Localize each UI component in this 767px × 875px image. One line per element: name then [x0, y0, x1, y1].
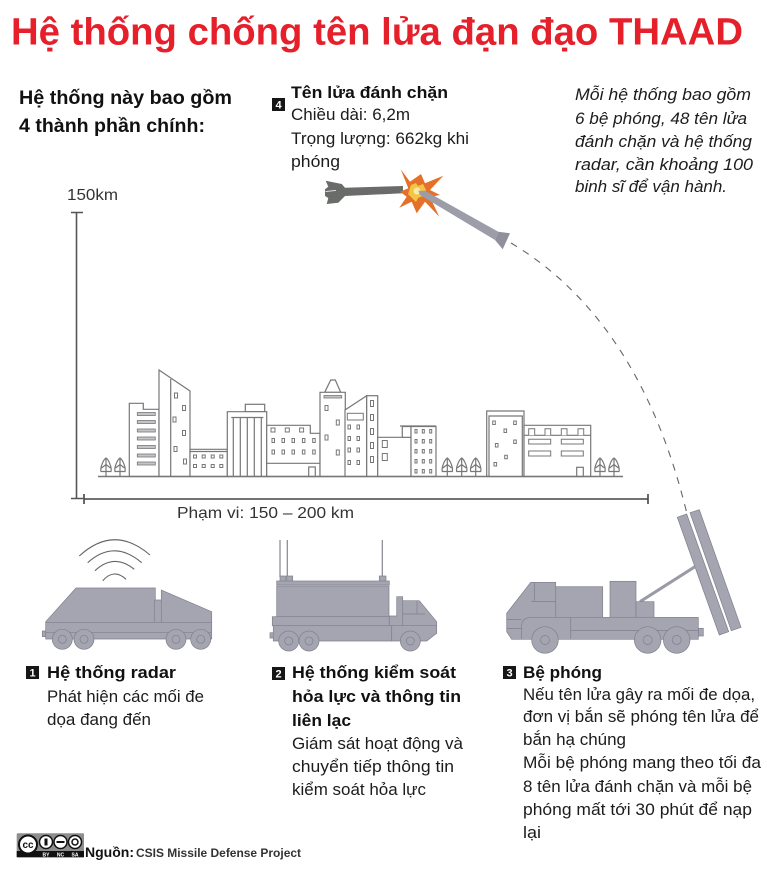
- interceptor text block: Tên lửa đánh chặn: [291, 83, 448, 102]
- number badge 3: 3: [506, 668, 513, 680]
- fire control text block: Giám sát hoạt động và: [292, 735, 464, 753]
- interceptor text block: [272, 83, 469, 171]
- interceptor missile: [418, 191, 510, 249]
- interceptor text block: Chiều dài: 6,2m: [291, 106, 410, 124]
- system note: radar, cần khoảng 100: [575, 156, 754, 174]
- radar text block: [26, 663, 204, 729]
- icon: creative commons badge: NC: [57, 852, 64, 858]
- radar text block: Hệ thống radar: [47, 663, 176, 682]
- interceptor text block: Trọng lượng: 662kg khi: [291, 130, 469, 148]
- icon: creative commons badge: SA: [72, 852, 79, 858]
- source line: CSIS Missile Defense Project: [136, 848, 301, 860]
- range axis: Phạm vi: 150 – 200 km: [177, 505, 354, 522]
- icon: creative commons badge: cc: [22, 840, 34, 851]
- number badge 4: [272, 98, 285, 112]
- icon: creative commons badge: [17, 833, 84, 858]
- system note: đánh chặn và hệ thống: [575, 133, 753, 151]
- launcher text block: Mỗi bệ phóng mang theo tối đa: [523, 753, 762, 772]
- system note: [575, 85, 754, 196]
- interceptor text block: phóng: [291, 153, 340, 171]
- radar text block: Phát hiện các mối đe: [47, 688, 204, 706]
- system note: 6 bệ phóng, 48 tên lửa: [575, 110, 747, 128]
- number badge 4: 4: [275, 100, 282, 112]
- launcher text block: đơn vị bắn sẽ phóng tên lửa để: [523, 707, 759, 726]
- fire control text block: kiểm soát hỏa lực: [292, 781, 426, 799]
- source line: Nguồn:: [85, 844, 134, 860]
- launcher text block: phóng mất tới 30 phút để nạp: [523, 801, 752, 819]
- intro heading: 4 thành phần chính:: [19, 116, 205, 137]
- icon: fire control truck: [270, 540, 437, 651]
- intro heading: [19, 88, 232, 137]
- explosion: [399, 169, 443, 217]
- number badge 1: [26, 666, 39, 680]
- launcher text block: 8 tên lửa đánh chặn và mỗi bệ: [523, 777, 752, 796]
- building group east: [487, 411, 591, 476]
- title: Hệ thống chống tên lửa đạn đạo THAAD: [11, 12, 743, 54]
- icon: radar truck: [42, 540, 212, 649]
- radar text block: dọa đang đến: [47, 711, 151, 729]
- launcher text block: Bệ phóng: [523, 663, 602, 682]
- fire control text block: Hệ thống kiểm soát: [292, 663, 456, 682]
- fire control text block: [272, 663, 464, 799]
- fire control text block: chuyển tiếp thông tin: [292, 758, 454, 776]
- fire control text block: liên lạc: [292, 711, 351, 730]
- launcher text block: [503, 663, 762, 842]
- city skyline: [98, 370, 623, 476]
- ground line: [98, 476, 623, 478]
- building group centre: [320, 380, 436, 476]
- system note: binh sĩ để vận hành.: [575, 178, 727, 196]
- number badge 3: [503, 666, 516, 680]
- number badge 2: 2: [275, 668, 282, 680]
- enemy missile: [325, 181, 403, 204]
- launcher text block: lại: [523, 824, 541, 842]
- launcher text block: Nếu tên lửa gây ra mối đe dọa,: [523, 686, 755, 704]
- launcher text block: bắn hạ chúng: [523, 730, 626, 749]
- altitude axis: [67, 187, 118, 499]
- system note: Mỗi hệ thống bao gồm: [575, 85, 751, 104]
- intro heading: Hệ thống này bao gồm: [19, 88, 232, 109]
- number badge 2: [272, 667, 285, 680]
- range axis: [84, 494, 648, 522]
- fire control text block: hỏa lực và thông tin: [292, 687, 461, 706]
- number badge 1: 1: [29, 668, 36, 680]
- icon: launcher truck: [507, 510, 741, 653]
- source line: [85, 844, 301, 860]
- trees: [101, 458, 619, 476]
- icon: creative commons badge: BY: [43, 852, 50, 858]
- missile trajectory: [511, 243, 687, 514]
- altitude axis: 150km: [67, 187, 118, 204]
- building group west: [129, 370, 320, 476]
